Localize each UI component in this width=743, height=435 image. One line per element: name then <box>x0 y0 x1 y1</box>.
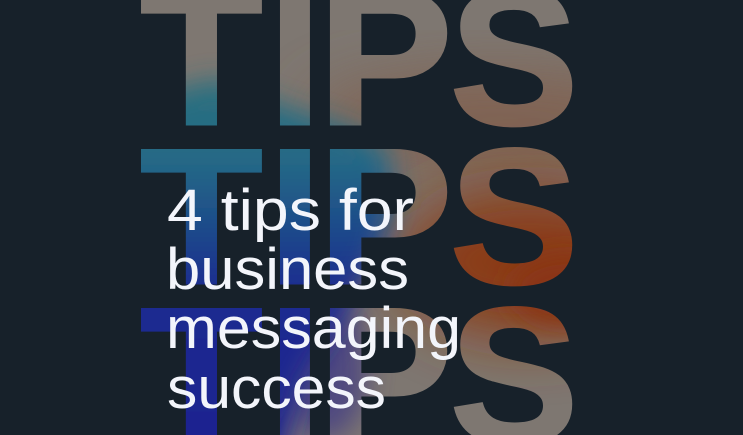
large word row 1 <box>140 0 579 166</box>
large word row 3 <box>140 267 579 435</box>
large word row 2: T <box>140 108 263 325</box>
title: messaging <box>166 296 461 361</box>
large word row 2: P <box>317 109 453 325</box>
title <box>166 178 461 421</box>
title: 4 tips for <box>167 178 414 243</box>
title: success <box>167 356 386 421</box>
title: business <box>166 237 409 302</box>
large word row 2 <box>140 108 579 326</box>
large word row 2: I <box>268 108 322 326</box>
large word row 2: S <box>449 108 579 326</box>
